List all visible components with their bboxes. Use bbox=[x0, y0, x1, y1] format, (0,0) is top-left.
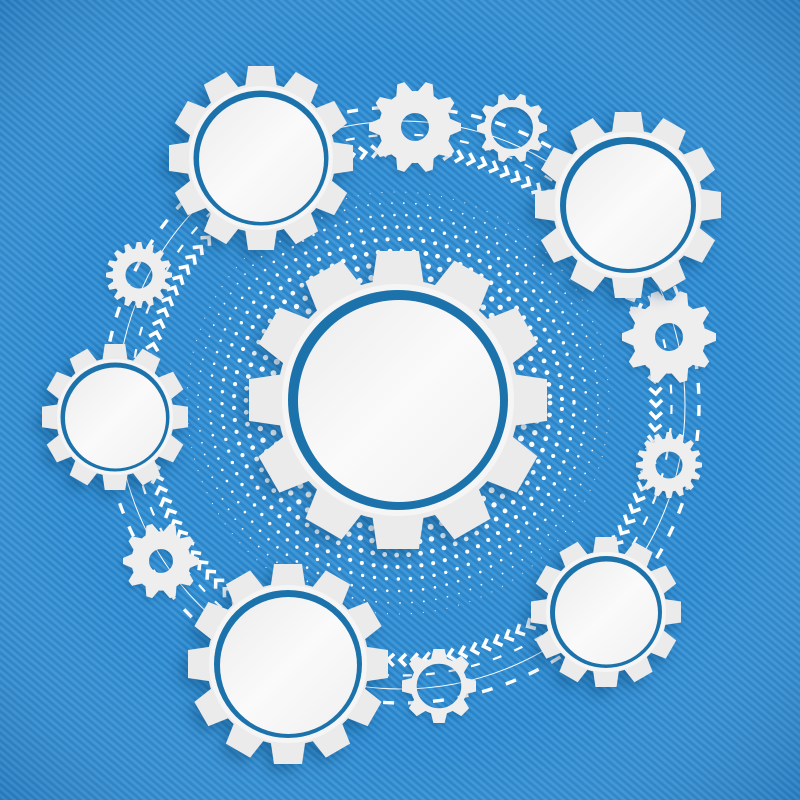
large gear: bottom left bbox=[188, 564, 388, 764]
large gear: left bbox=[42, 344, 188, 490]
orbit: clockwise chevron ring bbox=[115, 119, 687, 691]
small gear: top ring bbox=[477, 93, 547, 163]
small gear: bottom ring bbox=[402, 649, 476, 723]
small gear: right solid bbox=[622, 290, 716, 384]
small gear: lower right bbox=[636, 432, 702, 498]
large gear: bottom right bbox=[531, 537, 681, 687]
halftone dot rings around central gear bbox=[187, 192, 609, 614]
small gear: upper left bbox=[106, 242, 172, 308]
central main gear bbox=[249, 251, 547, 549]
orbit: dashed and thin concentric lines bbox=[103, 107, 699, 703]
small gear: lower left bbox=[123, 523, 199, 599]
large gear: top left bbox=[169, 66, 353, 250]
large gear: top right bbox=[535, 112, 721, 298]
small gear: top solid bbox=[369, 81, 461, 173]
